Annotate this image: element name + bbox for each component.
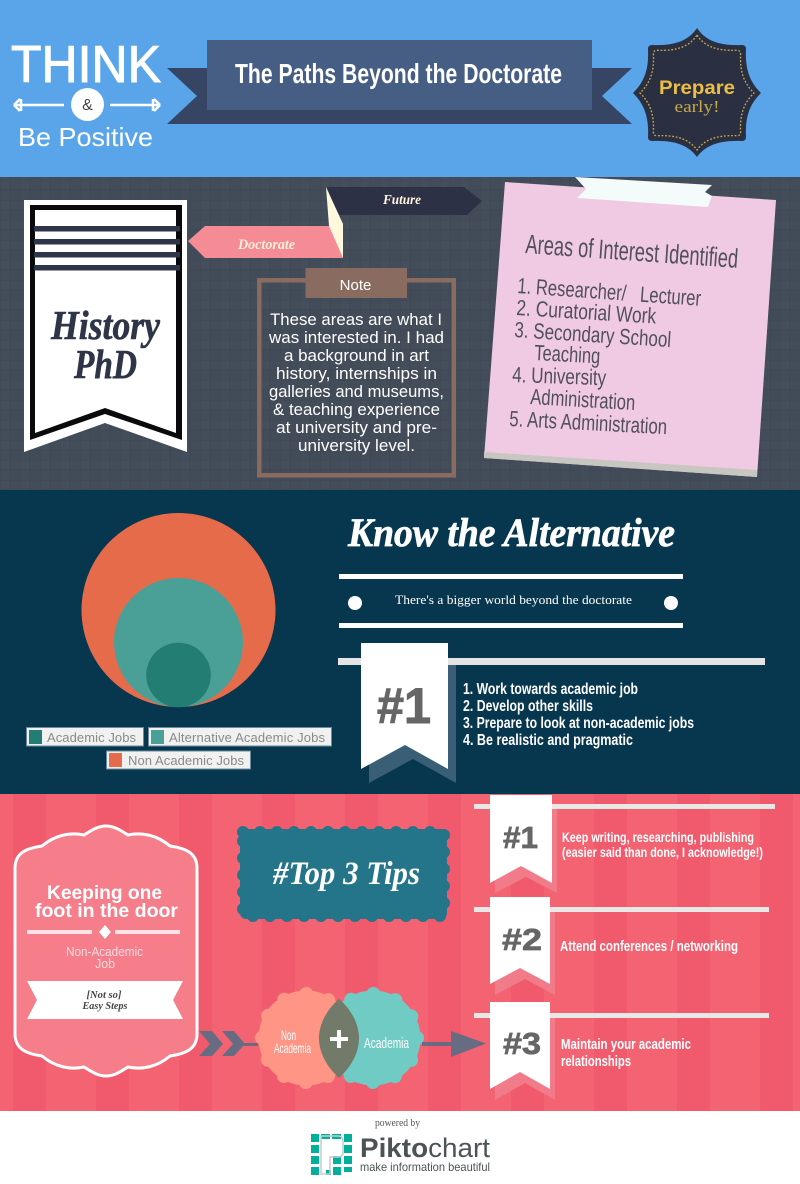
ribbon: history phd: PhD bbox=[73, 341, 137, 387]
badge: keeping one foot in the door bbox=[15, 826, 197, 1076]
ribbon: future bbox=[327, 187, 482, 215]
logo: think and be positive: THINK bbox=[11, 36, 161, 94]
tip 3: Maintain your academic bbox=[561, 1036, 691, 1053]
wordmark: piktochart: make information beautiful bbox=[360, 1160, 490, 1174]
ribbon: history phd bbox=[24, 200, 187, 452]
note text: a background in art bbox=[284, 346, 429, 365]
footer bbox=[0, 1111, 800, 1184]
ribbon: number 1: #1 bbox=[377, 678, 431, 734]
subheading band bbox=[339, 574, 683, 628]
sticky note text bbox=[509, 229, 739, 439]
badge: top 3 tips: #Top 3 Tips bbox=[272, 856, 420, 892]
ribbon: doctorate bbox=[188, 187, 343, 258]
arrow: chevrons to venn bbox=[199, 1031, 258, 1056]
tip 2 bbox=[474, 897, 769, 995]
chart legend: Alternative Academic Jobs bbox=[169, 730, 326, 745]
sticky note bbox=[484, 177, 776, 477]
sticky note text: Administration bbox=[530, 384, 636, 415]
tip 2: Attend conferences / networking bbox=[560, 938, 738, 955]
ribbon: number 1 bbox=[361, 643, 456, 783]
sticky note text: 3. Secondary School bbox=[514, 317, 672, 352]
section: doctorate and interests bbox=[0, 177, 800, 490]
tip 2: #2 bbox=[502, 922, 542, 957]
icon: piktochart logo bbox=[311, 1134, 352, 1175]
badge: prepare early bbox=[633, 28, 761, 157]
venn diagram: Non bbox=[281, 1027, 296, 1043]
note text: was interested in. I had bbox=[268, 328, 444, 347]
section: know the alternative bbox=[0, 490, 800, 794]
nested circle chart bbox=[82, 513, 276, 707]
list: alternative steps: 3. Prepare to look at non-academic jobs bbox=[463, 715, 694, 732]
badge: prepare early: Prepare bbox=[659, 78, 735, 99]
note text: galleries and museums, bbox=[269, 382, 444, 401]
sticky note text: 5. Arts Administration bbox=[509, 406, 668, 439]
badge: keeping one foot in the door: Non-Academic bbox=[66, 944, 143, 959]
powered by: powered by bbox=[375, 1118, 420, 1129]
badge: keeping one foot in the door: foot in the door bbox=[35, 901, 179, 922]
note text: These areas are what I bbox=[270, 310, 442, 329]
chart legend: Non Academic Jobs bbox=[128, 753, 244, 768]
venn diagram: Academia bbox=[364, 1035, 409, 1052]
note text: at university and pre- bbox=[276, 418, 437, 437]
logo: think and be positive bbox=[11, 36, 161, 152]
logo: think and be positive: Be Positive bbox=[18, 122, 153, 152]
note text: & teaching experience bbox=[273, 400, 440, 419]
badge: keeping one foot in the door: [Not so] bbox=[86, 989, 122, 1001]
arrow: venn to tip 3 bbox=[422, 1031, 486, 1057]
title banner bbox=[167, 40, 632, 124]
rule bbox=[338, 658, 765, 665]
logo: think and be positive: & bbox=[82, 97, 93, 114]
header section bbox=[0, 0, 800, 177]
badge: top 3 tips bbox=[240, 829, 447, 919]
note box: Note bbox=[340, 277, 371, 294]
heading: know the alternative: Know the Alternative bbox=[347, 510, 675, 555]
venn diagram bbox=[258, 990, 420, 1086]
badge: keeping one foot in the door: Keeping one bbox=[47, 883, 162, 904]
tip 1: #1 bbox=[503, 820, 538, 855]
ribbon: history phd: History bbox=[50, 302, 161, 348]
note text: university level. bbox=[298, 436, 415, 455]
section: top tips bbox=[0, 794, 800, 1111]
chart legend: Academic Jobs bbox=[47, 730, 136, 745]
title banner: The Paths Beyond the Doctorate bbox=[235, 58, 562, 89]
note text: history, internships in bbox=[276, 364, 437, 383]
list: alternative steps: 4. Be realistic and pragmatic bbox=[463, 732, 633, 749]
list: alternative steps: 1. Work towards academic job bbox=[463, 681, 638, 698]
sticky note text: 4. University bbox=[512, 362, 607, 390]
chart legend bbox=[26, 728, 332, 769]
ribbon: future: Future bbox=[382, 193, 421, 208]
badge: keeping one foot in the door: Job bbox=[95, 956, 115, 971]
tip 3 bbox=[474, 1002, 769, 1100]
note text bbox=[268, 310, 444, 455]
ribbon: doctorate: Doctorate bbox=[237, 237, 295, 253]
badge: keeping one foot in the door: Easy Steps bbox=[82, 1000, 128, 1012]
tip 1 bbox=[474, 795, 775, 893]
subheading band: There's a bigger world beyond the doctorate bbox=[395, 592, 632, 607]
list: alternative steps bbox=[463, 681, 694, 749]
list: alternative steps: 2. Develop other skills bbox=[463, 698, 593, 715]
note box bbox=[259, 268, 454, 475]
sticky note text: Teaching bbox=[534, 340, 601, 368]
badge: prepare early: early! bbox=[674, 97, 720, 116]
sticky note text: 1. Researcher/ Lecturer bbox=[517, 273, 702, 311]
wordmark: piktochart: Piktochart bbox=[360, 1133, 491, 1163]
venn diagram: Academia bbox=[274, 1040, 311, 1056]
tip 3: relationships bbox=[561, 1053, 631, 1070]
sticky note text: 2. Curatorial Work bbox=[516, 295, 658, 329]
tip 3: #3 bbox=[503, 1026, 541, 1061]
